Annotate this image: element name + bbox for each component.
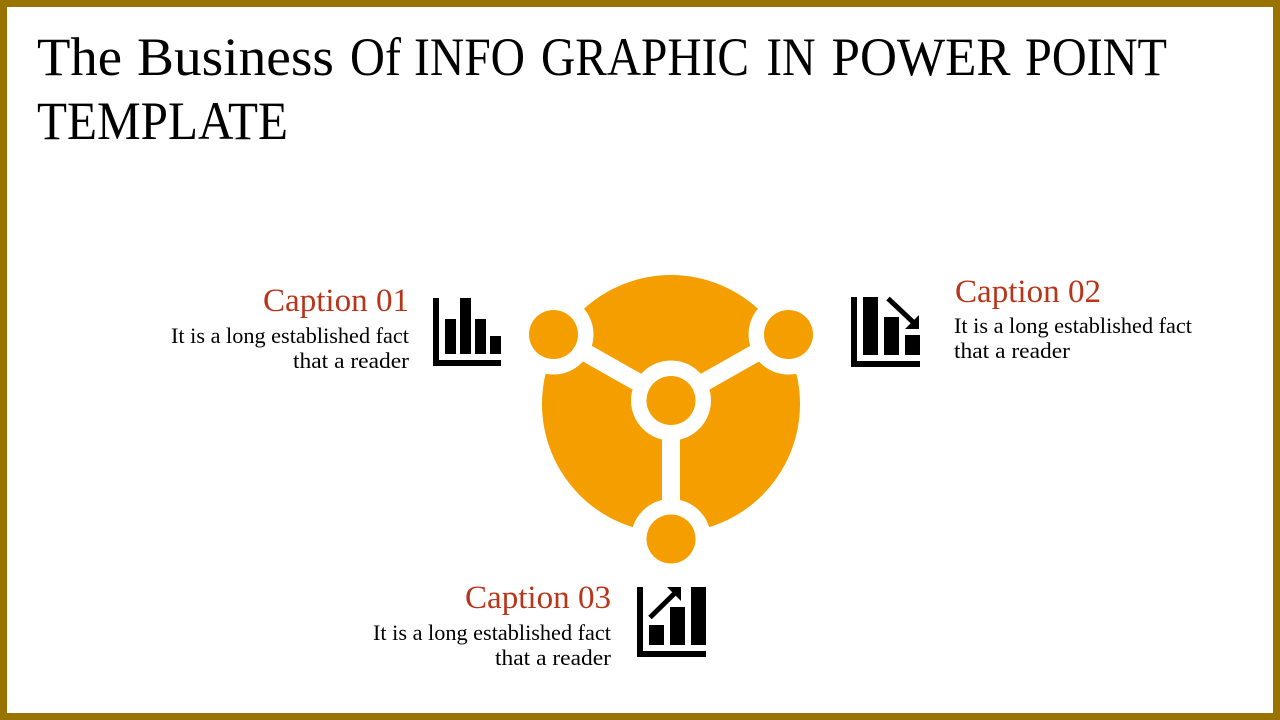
- caption 03 text: Caption 03: [465, 580, 611, 616]
- title: INFO: [414, 27, 525, 87]
- caption 02 text: [954, 274, 1192, 363]
- caption 03 text: It is a long established fact: [373, 620, 611, 645]
- caption 03 text: [373, 580, 612, 670]
- orange disc: [542, 275, 800, 533]
- caption 02 text: Caption 02: [955, 274, 1101, 310]
- icon: declining bar chart with arrow: [851, 297, 920, 367]
- caption 01 text: Caption 01: [263, 283, 409, 319]
- title: [37, 27, 1167, 151]
- caption 03 text: that a reader: [495, 645, 612, 670]
- caption 01 text: that a reader: [293, 348, 410, 373]
- title: TEMPLATE: [37, 91, 288, 151]
- title: IN: [766, 27, 816, 87]
- white node rings: [514, 294, 828, 579]
- caption 01 text: It is a long established fact: [171, 323, 409, 348]
- orange nodes: [529, 310, 813, 564]
- caption 01 text: [171, 283, 410, 373]
- title: The: [37, 27, 122, 87]
- icon: rising bar chart with arrow: [637, 587, 706, 657]
- central hub diagram: [514, 275, 828, 579]
- icon: bar chart: [433, 298, 501, 366]
- caption 02 text: It is a long established fact: [954, 313, 1192, 338]
- title: GRAPHIC: [541, 27, 749, 87]
- title: POINT: [1025, 27, 1167, 87]
- title: POWER: [832, 27, 1010, 87]
- white spokes: [554, 334, 788, 539]
- title: Of: [350, 27, 401, 87]
- title: Business: [137, 27, 334, 87]
- caption 02 text: that a reader: [954, 338, 1071, 363]
